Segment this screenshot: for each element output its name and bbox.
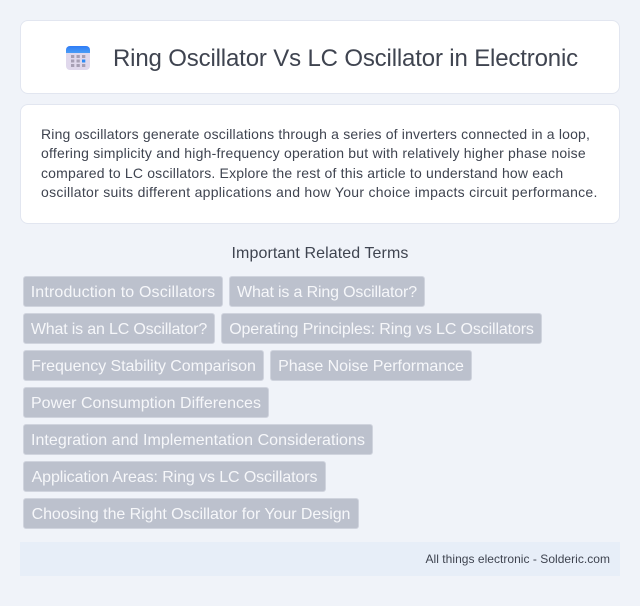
section heading: Important Related Terms [232, 245, 408, 262]
icon: calendar [66, 46, 90, 70]
tag [221, 313, 542, 344]
intro text: oscillator suits different applications and how Your choice impacts circuit performance. [41, 184, 598, 200]
title: Ring Oscillator Vs LC Oscillator in Electronic [113, 45, 578, 72]
tag: Integration and Implementation Considerations [31, 432, 365, 449]
intro text: Ring oscillators generate oscillations through a series of inverters connected in a loop, [41, 126, 590, 142]
tag: Introduction to Oscillators [31, 284, 215, 301]
tag [23, 276, 223, 307]
tag [23, 313, 215, 344]
tag: Choosing the Right Oscillator for Your Design [32, 506, 350, 523]
tag [23, 350, 264, 381]
related terms tags [23, 276, 542, 529]
tag: Power Consumption Differences [31, 395, 261, 412]
tag: Phase Noise Performance [278, 358, 464, 375]
tag: Operating Principles: Ring vs LC Oscillators [229, 321, 534, 338]
header panel [20, 20, 620, 94]
footer bar [20, 542, 620, 576]
tag: What is a Ring Oscillator? [237, 284, 417, 301]
tag [270, 350, 472, 381]
tag: Frequency Stability Comparison [31, 358, 256, 375]
tag: What is an LC Oscillator? [31, 321, 207, 338]
tag: Application Areas: Ring vs LC Oscillators [32, 469, 317, 486]
footer text: All things electronic - Solderic.com [426, 552, 610, 566]
tag [229, 276, 425, 307]
tag [23, 387, 269, 418]
tag [23, 498, 359, 529]
tag [23, 424, 373, 455]
intro text [41, 126, 598, 200]
intro text: offering simplicity and high-frequency operation but with relatively higher phase noise [41, 145, 586, 161]
intro text: compared to LC oscillators. Explore the rest of this article to understand how each [41, 165, 563, 181]
intro text panel [20, 104, 620, 224]
tag [23, 461, 326, 492]
